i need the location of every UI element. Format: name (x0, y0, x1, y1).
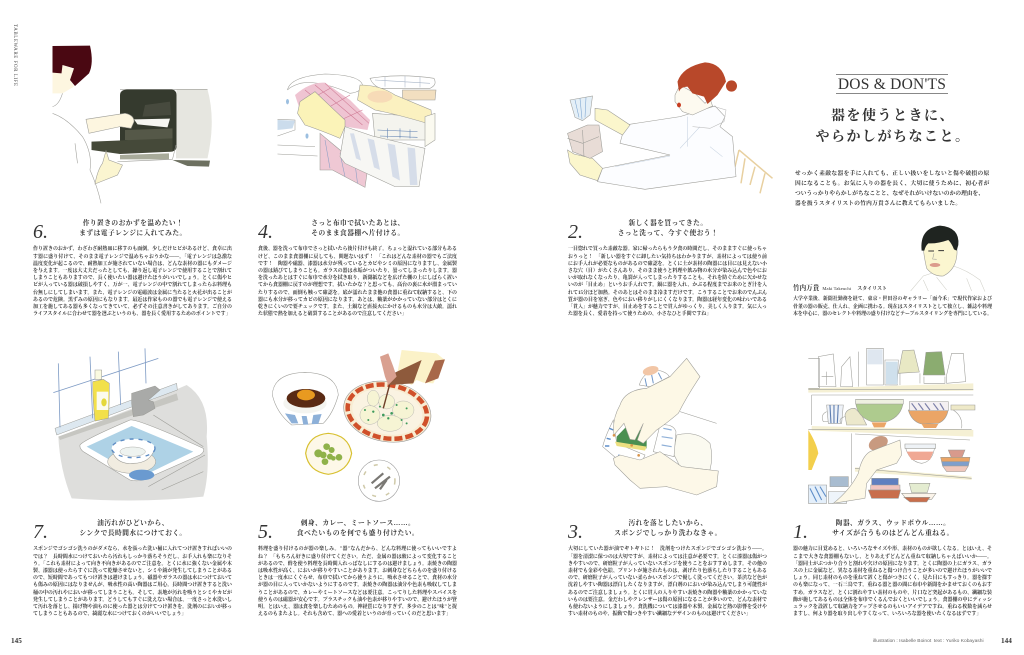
body text: 一目惚れで買った素敵な器。家に帰ったらもう夕食の時間だし、そのまますぐに使っちゃおうっと！ 「新しい器をすぐに卸したい気持ちはわかりますが、素材によっては使う前にお手入れが必要なものがあるので確認を。とくに土が素材の陶器には目には見えない小さな穴（目）がたくさんあり、そのまま使うと料理や飲み物の水分が染み込んで色やにおいが取れなくなったり、亀裂が入ってしまったりすることも。それを防ぐために欠かせないのが「目止め」というお手入れです。鍋に器を入れ、かぶる程度までお米のとぎ汁を入れて15分ほど加熱。そのあとはそのまま冷ますだけです。こうすることでお米のでんぷん質が器の目を塞ぎ、色やにおい移りがしにくくなります。陶器は経年変化の味わいである「貫入」が魅力ですが、目止めをすることで貫入がゆっくり、美しく入ります。気に入った器を長く、愛着を持って使うための、小さなひと手間ですね」 (568, 247, 767, 317)
intro text: せっかく素敵な器を手に入れても、正しい扱いをしないと傷や破損の原 (795, 171, 990, 177)
body text: 料理を盛り付けるのが器の楽しみ。"器"なんだから、どんな料理に使ってもいいですよね？ 「もちろん好きに盛り付けてください。ただ、金属の器は酸によって変化することがあるので、酢を使う料理を長時間入れっぱなしにするのは避けましょう。素焼きの陶器は吸水性が高く、においが移りやすいことがあります。お刺身などちらものを盛り付けるときは一度水にくぐらせ、布巾で拭いてから使うように。吸水させることで、食材の水分が器の目に入っていかないようにするのです。素焼きの陶器は油分や色素も吸収してしまうことがあるので、カレーやミートソースなどは要注意。こってりした料理やスパイスを使うものは磁器が安心です。プラスチックも油や色素が移りやすいので、避けたほうが賢明。とはいえ、器は食を楽しむためのもの。神経質になりすぎず、多少のことは"味"と捉えるのもまたよし。それも含めて、器への愛着というのが育っていくのだと思います」 (258, 547, 457, 617)
intro text (795, 170, 990, 207)
illustration: woman taking dish from microwave oven (52, 46, 212, 204)
panel: tip 6 microwave (33, 218, 232, 317)
heading (79, 218, 187, 237)
number 3: 3. (568, 521, 583, 543)
credit line: illustration : Isabelle Boinot text : Yuriko Kobayashi (873, 638, 984, 644)
heading: さっと布巾で拭いたあとは、 (311, 220, 405, 227)
number 1: 1. (793, 521, 808, 543)
main title (816, 108, 970, 145)
name and title: 竹内万貴 Maki Takeuchi スタイリスト (793, 284, 887, 292)
heading: 陶器、ガラス、ウッドボウル……。 (836, 520, 950, 527)
heading (297, 519, 419, 537)
panel: tip 4 towel (258, 219, 457, 317)
portrait: Maki Takeuchi (910, 226, 986, 292)
illustration: drying plate with a towel (278, 74, 436, 188)
section tag: dos and don'ts: DOS & DON'TS (838, 76, 946, 93)
page number 144: 144 (1001, 637, 1012, 645)
heading: サイズが合うものはどんどん重ねる。 (832, 530, 954, 537)
number 7: 7. (33, 521, 48, 543)
heading: 油汚れがひどいから、 (97, 520, 169, 527)
main title: やらかしがちなこと。 (816, 130, 970, 145)
bio text: 大学卒業後、新聞社勤務を経て、東京・世田谷のギャラリー「而今禾」で現代作家および (793, 297, 992, 302)
number 2: 2. (568, 221, 583, 243)
illustration: hands scrubbing a bowl with a green sponge (602, 358, 719, 496)
heading: 作り置きのおかずを温めたい！ (83, 220, 183, 227)
heading: 新しく器を買ってきた。 (628, 220, 708, 227)
illustration: kitchen sink with soaking dishes (53, 348, 208, 500)
heading (832, 519, 954, 537)
bio text (793, 295, 992, 317)
body text: スポンジでゴシゴシ洗うのがダメなら、水を張った洗い桶に入れてつけ置きすればいいのでは？ 長時間水につけておいたら汚れもしっかり落ちそうだし、お手入れも楽になりそう。「これも素材によって向き不向きがあるのでご注意を。とくに水に強くない金属や木製、漆器は使ったらすぐに洗って乾燥させないと、シミや錆が発生してしまうことがあるので、短時間であってもつけ置きは避けましょう。磁器やガラスの器は水につけておいても傷みの原因にはなりませんが、吸水性の高い陶器はご用心。長時間つけ置きすると洗い桶の中の汚れやにおいが移ってしまうことも。そして、素地が汚れを吸うとシミやカビが発生してしまうことがあります。どうしてもすぐに洗えない場合は、一度さっと水洗いして汚れを落とし、揚げ物や油ものに使った器とは分けてつけ置きを。洗剤のにおいが移ってしまうこともあるので、綺麗な水につけておくのがいいでしょう」 (33, 547, 232, 617)
heading (618, 219, 718, 237)
body text: 器の魅力に目覚めると、いろいろなサイズや形、素材のものが欲しくなる。とはいえ、そこまで大きな食器棚もないし、とりあえずどんどん重ねて収納しちゃえばいいか――。「器同士がぶつかり合うと割れや欠けの原因になります。とくに陶器の上にガラス、ガラスの上に金属など、異なる素材を重ねると傷つけ合うことが多いので避けたほうがいいでしょう。同じ素材のものを重ねて置くと傷がつきにくく、見た目にもすっきり。器を探すのも楽になって、一石三鳥です。重ねる器と器の間に布巾や新聞をかませておくのもおすすめ。ガラスなど、とくに割れやすい素材のものや、片口など突起があるもの、繊細な装飾が施してあるものは全体を布巾でくるんでおくといいでしょう。食器棚の中にディッシュラックを設置して収納力をアップさせるのもいいアイデアですね。重ねる枚数を減らせますし、何より器を取り出しやすくなって、いろいろな器を使いたくなるはずです」 (793, 547, 992, 617)
main title: 器を使うときに、 (831, 109, 955, 124)
illustration: rice bowl, plates and small dishes (272, 350, 445, 502)
intro text: 器を扱うスタイリストの竹内万貴さんに教えてもらいました。 (795, 201, 961, 207)
heading: 刺身、カレー、ミートソース……。 (301, 520, 415, 527)
heading: そのまま食器棚へ片付ける。 (311, 230, 405, 237)
number 5: 5. (258, 521, 273, 543)
intro text: 因になることも。お気に入りの器を長く、大切に使うために、初心者が (795, 181, 990, 187)
heading: スポンジでしっかり洗わなきゃ。 (614, 530, 722, 537)
panel: tip 1 stacking (793, 519, 992, 617)
bio text: 本を中心に、器のセレクトや料理の盛り付けなどテーブルスタイリングを専門にしている。 (793, 312, 992, 317)
body text: 作り置きのおかず、わざわざ耐熱皿に移すのも面倒。少しだけヒビがあるけど、食卓に出す器に盛り付けて、そのまま電子レンジで温めちゃおうかな――。「電子レンジは急激な温度変化が起こるので、耐熱加工が施されていない場合は、どんな素材の器にもダメージを与えます。一度は大丈夫だったとしても、繰り返し電子レンジで使用することで割れてしまうこともありますので、長く使いたい器は避けたほうがいいでしょう。とくに傷やヒビが入っている器は破損しやすく、万が一、電子レンジの中で割れてしまったらお料理も台無しにしてしまいます。また、電子レンジの電磁波は金属に当たると火花が出ることがあるので危険。黒ずみの原因にもなります。最近は作家ものの器でも電子レンジで使える加工を施してある器も多くなってきていて、必ずその注意書きがしてあります。ご自分のライフスタイルに合わせて器を選ぶというのも、器を長く愛用するためのポイントです」 (33, 247, 232, 317)
bio text: 骨董の器の販売、仕入れ、企画に携わる。現在はスタイリストとして独立し、雑誌や料理 (793, 304, 992, 310)
heading: 汚れを落としたいから、 (628, 520, 708, 527)
heading: 食べたいものを何でも盛り付けたい。 (297, 530, 419, 537)
intro text: ついうっかりやらかしがちなことと、なぜそれがいけないのかの理由を、 (795, 191, 984, 197)
running head: tableware for life: TABLEWARE FOR LIFE (12, 24, 17, 87)
heading (311, 219, 405, 237)
heading (79, 519, 187, 537)
heading: シンクで長時間水につけておく。 (79, 530, 187, 537)
number 6: 6. (33, 221, 48, 243)
heading: まずは電子レンジに入れてみた。 (79, 230, 187, 237)
body text: 食後、器を洗って布巾でさっと拭いたら後片付けも終了。ちょっと湿れている部分もあるけど、このまま食器棚に戻しても、問題ないはず！ 「これはどんな素材の器でもご法度です！ 陶器や磁器、漆器は水分が残っているとカビやシミの原因になりますし、金属製の器は錆びてしまうことも。ガラスの器は水垢がついたり、曇ってしまったりします。器を洗ったあとはすぐに布巾で水分を拭き取り、新聞紙などを広げた棚の上にしばらく置いてから食器棚に戻すのが理想です。拭いたかな？と思っても、高台の裏に水が溜まっていたりするので、面倒も触って確認を。底が濡れたまま他の食器に重ねて収納すると、下の器にも水分が移ってカビの原因になります。あとは、釉薬がかかっていない部分はとくに乾きにくいので要チェックです。また、土鍋など直接火にかけるものも水分は大敵。濡れた状態で熱を加えると破裂することがあるので注意してください」 (258, 247, 457, 317)
illustration: woman with new cup and box (567, 62, 773, 194)
panel: tip 2 new dishes (568, 219, 767, 317)
panel: tip 5 serving (258, 519, 457, 617)
heading: さっと洗って、今すぐ使おう！ (618, 230, 718, 237)
illustration: cupboard shelves with stacked dishes (808, 348, 976, 504)
number 4: 4. (258, 221, 273, 243)
body text: 大切にしていた器が油でギトギトに！ 洗剤をつけたスポンジでゴシゴシ洗おう――。「器を清潔に保つのは大切ですが、素材によっては注意が必要です。とくに漆器は傷がつきやすいので、研磨粒子が入っていないスポンジを使うことをおすすめします。その他の素材でも金彩や色絵、プリントが施されたものは、剥げたり色落ちしたりすることもあるので、研磨粒子が入っていない柔らかいスポンジで優しく洗ってください。茶渋など色が沈着しやすい陶器は漂白したくなりますが、漂白剤のにおいが染み込んでしまう可能性があるのでご注意しましょう。とくに貫入の入りやすい素焼きの陶器や釉薬のかかっていないものは要注意。金だわしやクレンザーは傷の原因になることが多いので、どんな素材でも使わないようにしましょう。食洗機については漆器や木製、金属など熱の影響を受けやすい素材のものや、振動で傷つきやすい繊細なデザインのものは避けてください」 (568, 547, 767, 617)
heading (614, 519, 722, 537)
page number 145: 145 (11, 637, 22, 645)
panel: tip 3 sponge (568, 519, 767, 617)
panel: tip 7 soaking (33, 519, 232, 617)
